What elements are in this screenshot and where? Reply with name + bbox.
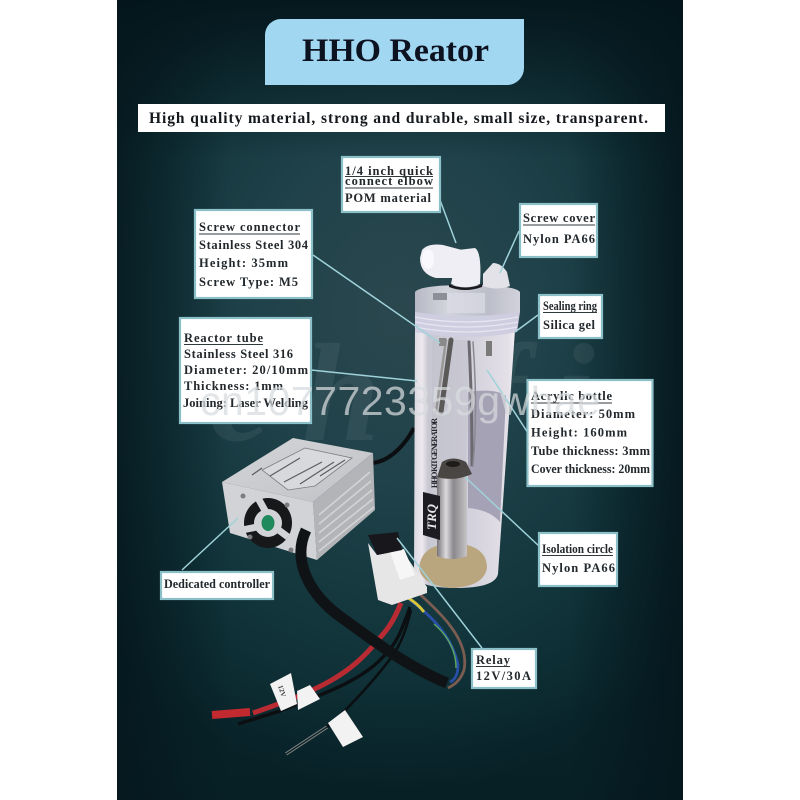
title banner xyxy=(265,19,524,85)
generator label: HHO KIT GENERATOR xyxy=(430,418,439,488)
callout: relay: Relay xyxy=(476,653,511,667)
base disc xyxy=(419,545,487,588)
steel reactor tube xyxy=(437,477,467,559)
connector bolts xyxy=(439,338,446,346)
callout: dedicated controller xyxy=(161,572,273,599)
relay xyxy=(368,532,427,605)
callout: sealing ring: Sealing ring xyxy=(543,299,598,313)
red wire xyxy=(212,603,401,715)
inner grey patch xyxy=(468,391,506,522)
callout: quick connect elbow: POM material xyxy=(345,191,432,205)
callout: quick connect elbow xyxy=(342,157,440,212)
callout: screw connector: Height: 35mm xyxy=(199,256,289,270)
fan xyxy=(242,498,292,548)
electrode rods xyxy=(436,340,476,465)
front face xyxy=(222,482,317,560)
title banner: HHO Reator xyxy=(302,33,489,69)
quick connect elbow xyxy=(420,245,480,287)
callout: screw cover: Nylon PA66 xyxy=(523,232,595,246)
callout: reactor tube: Stainless Steel 316 xyxy=(184,347,293,361)
printed label xyxy=(262,448,352,490)
tagline strip: High quality material, strong and durable, small size, transparent. xyxy=(149,110,648,127)
threaded cover xyxy=(415,312,520,337)
reactor bottle xyxy=(414,245,520,588)
wire tags: 12V xyxy=(276,684,287,698)
bottle tube xyxy=(414,330,515,588)
tagline strip xyxy=(138,104,665,132)
callout: isolation circle: Nylon PA66 xyxy=(542,561,615,575)
callout: reactor tube: Joining: Laser Welding xyxy=(183,396,309,410)
dedicated controller unit xyxy=(222,438,375,560)
black wires xyxy=(238,607,411,754)
coloured relay wires xyxy=(388,590,465,688)
watermark text: cn1077723359gwhae xyxy=(200,378,600,424)
callout: isolation circle: Isolation circle xyxy=(542,542,613,556)
callout: reactor tube: Diameter: 20/10mm xyxy=(184,363,309,377)
callout: reactor tube: Reactor tube xyxy=(184,331,263,345)
poster background xyxy=(117,0,683,800)
callout: acrylic bottle: Tube thickness: 3mm xyxy=(531,444,651,458)
leader lines xyxy=(182,200,540,648)
callout: reactor tube xyxy=(180,318,311,423)
callout: screw cover xyxy=(520,204,597,257)
callout: screw connector: Stainless Steel 304 xyxy=(199,238,309,252)
callout: relay: 12V/30A xyxy=(476,669,531,683)
callout: acrylic bottle xyxy=(528,380,652,486)
isolation circle xyxy=(437,458,472,479)
generator label: TRQ xyxy=(424,503,439,530)
callout: isolation circle xyxy=(539,533,617,586)
callout: quick connect elbow: 1/4 inch quick xyxy=(345,164,433,178)
controller rear cable xyxy=(368,428,414,463)
callout: dedicated controller: Dedicated controller xyxy=(164,577,270,591)
black gasket xyxy=(449,284,482,290)
generator label xyxy=(423,418,440,540)
wire tags xyxy=(270,673,363,747)
callout: screw connector: Screw Type: M5 xyxy=(199,275,298,289)
callout: screw cover: Screw cover xyxy=(523,211,595,225)
lid recess xyxy=(433,293,447,300)
callout: acrylic bottle: Cover thickness: 20mm xyxy=(531,462,651,476)
top face xyxy=(222,438,373,502)
thick black cable xyxy=(301,530,447,683)
callout: quick connect elbow: connect elbow xyxy=(345,174,433,188)
callout: acrylic bottle: Diameter: 50mm xyxy=(531,407,636,421)
side face xyxy=(313,453,375,560)
aluminium lid xyxy=(415,285,520,316)
callout: relay xyxy=(472,649,536,688)
callout: reactor tube: Thickness: 1mm xyxy=(184,379,284,393)
callout: sealing ring xyxy=(539,295,602,338)
callout: screw connector: Screw connector xyxy=(199,220,300,234)
screw cover xyxy=(483,263,510,288)
callout: acrylic bottle: Acrylic bottle xyxy=(531,389,612,403)
callout: screw connector xyxy=(195,210,312,298)
callout: acrylic bottle: Height: 160mm xyxy=(531,426,628,440)
callout: sealing ring: Silica gel xyxy=(543,318,596,332)
watermark logo: chifi xyxy=(210,316,595,471)
